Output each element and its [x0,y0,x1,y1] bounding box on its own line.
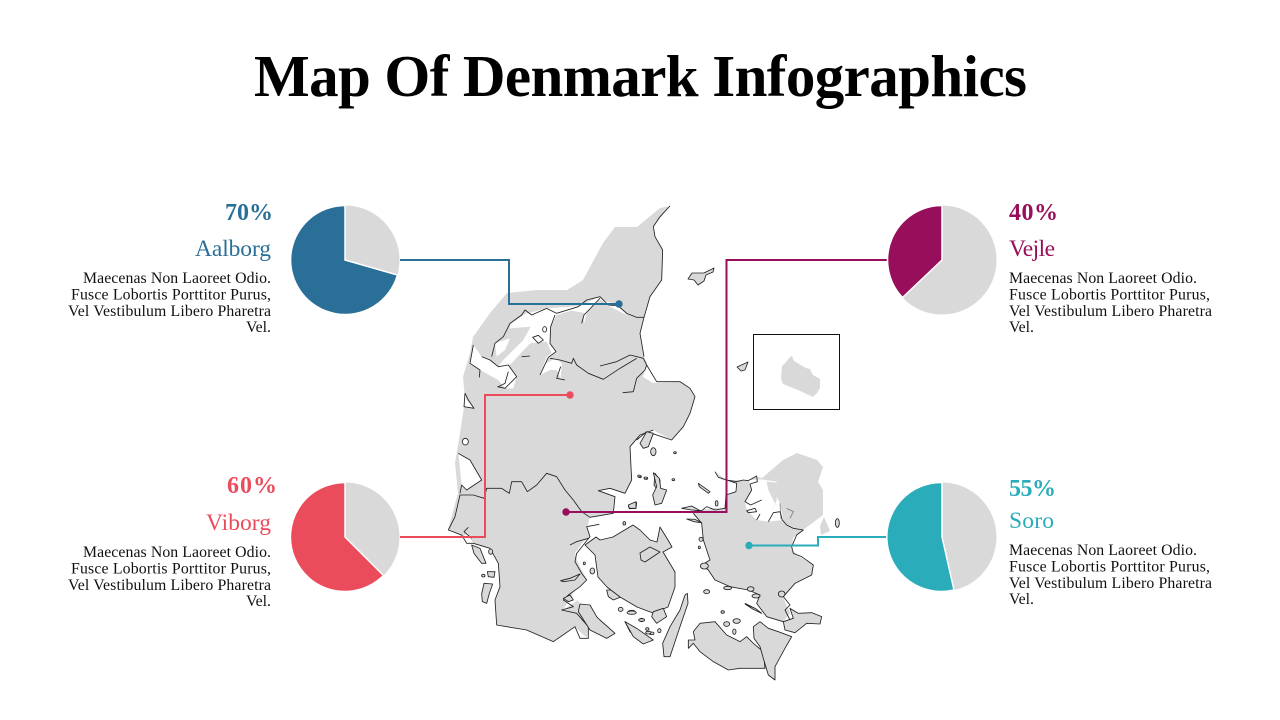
city name: Viborg [206,510,271,536]
islands near Jutland [472,268,748,643]
description: Fusce Lobortis Porttitor Purus, [1009,286,1210,304]
description: Vel Vestibulum Libero Pharetra [1009,575,1212,592]
connector: Vejle [562,260,887,516]
Zealand offshore islets [682,501,839,634]
panel: Aalborg [68,200,400,336]
city name: Soro [1009,508,1054,534]
description [68,544,271,610]
city name: Vejle [1009,236,1055,262]
description: Vel. [246,319,271,336]
pie chart: 55% [887,482,996,592]
panel: Viborg [68,473,400,610]
connector: Soro [745,537,887,549]
description [1009,542,1212,608]
Funen [585,525,675,613]
description: Vel. [1009,591,1034,608]
description: Vel. [1009,319,1034,336]
description: Maecenas Non Laoreet Odio. [1009,270,1197,287]
Langeland and small southern islands [623,452,710,657]
description [68,270,271,336]
city name: Aalborg [195,236,271,262]
pie chart: 40% [888,206,996,314]
panel: Vejle [888,200,1212,336]
percentage: 70% [225,200,273,226]
description: Maecenas Non Laoreet Odio. [1009,542,1197,559]
description: Vel. [246,593,271,610]
description: Maecenas Non Laoreet Odio. [83,544,271,561]
connector: Viborg [400,391,574,537]
description: Fusce Lobortis Porttitor Purus, [71,286,271,304]
description: Vel Vestibulum Libero Pharetra [68,577,271,594]
pie chart: 60% [290,482,400,592]
Lolland, Falster and Mon [688,608,822,680]
description: Vel Vestibulum Libero Pharetra [68,303,271,320]
Bornholm island [781,356,820,397]
panel: Soro [887,476,1212,608]
connector: Aalborg [400,260,623,308]
description: Fusce Lobortis Porttitor Purus, [1009,558,1210,576]
Zealand [692,453,823,622]
description: Vel Vestibulum Libero Pharetra [1009,303,1212,320]
title: Map Of Denmark Infographics [254,43,1027,109]
inset frame [754,334,840,410]
percentage: 55% [1009,476,1056,502]
Kullen / Amager patch [820,517,830,535]
map of Denmark [448,206,840,680]
description [1009,270,1212,336]
pie chart: 70% [290,206,400,314]
percentage: 60% [227,473,277,499]
description: Fusce Lobortis Porttitor Purus, [71,560,271,578]
Bornholm location marker [754,334,840,410]
Jutland mainland [448,206,695,642]
description: Maecenas Non Laoreet Odio. [83,270,271,287]
percentage: 40% [1009,200,1058,226]
